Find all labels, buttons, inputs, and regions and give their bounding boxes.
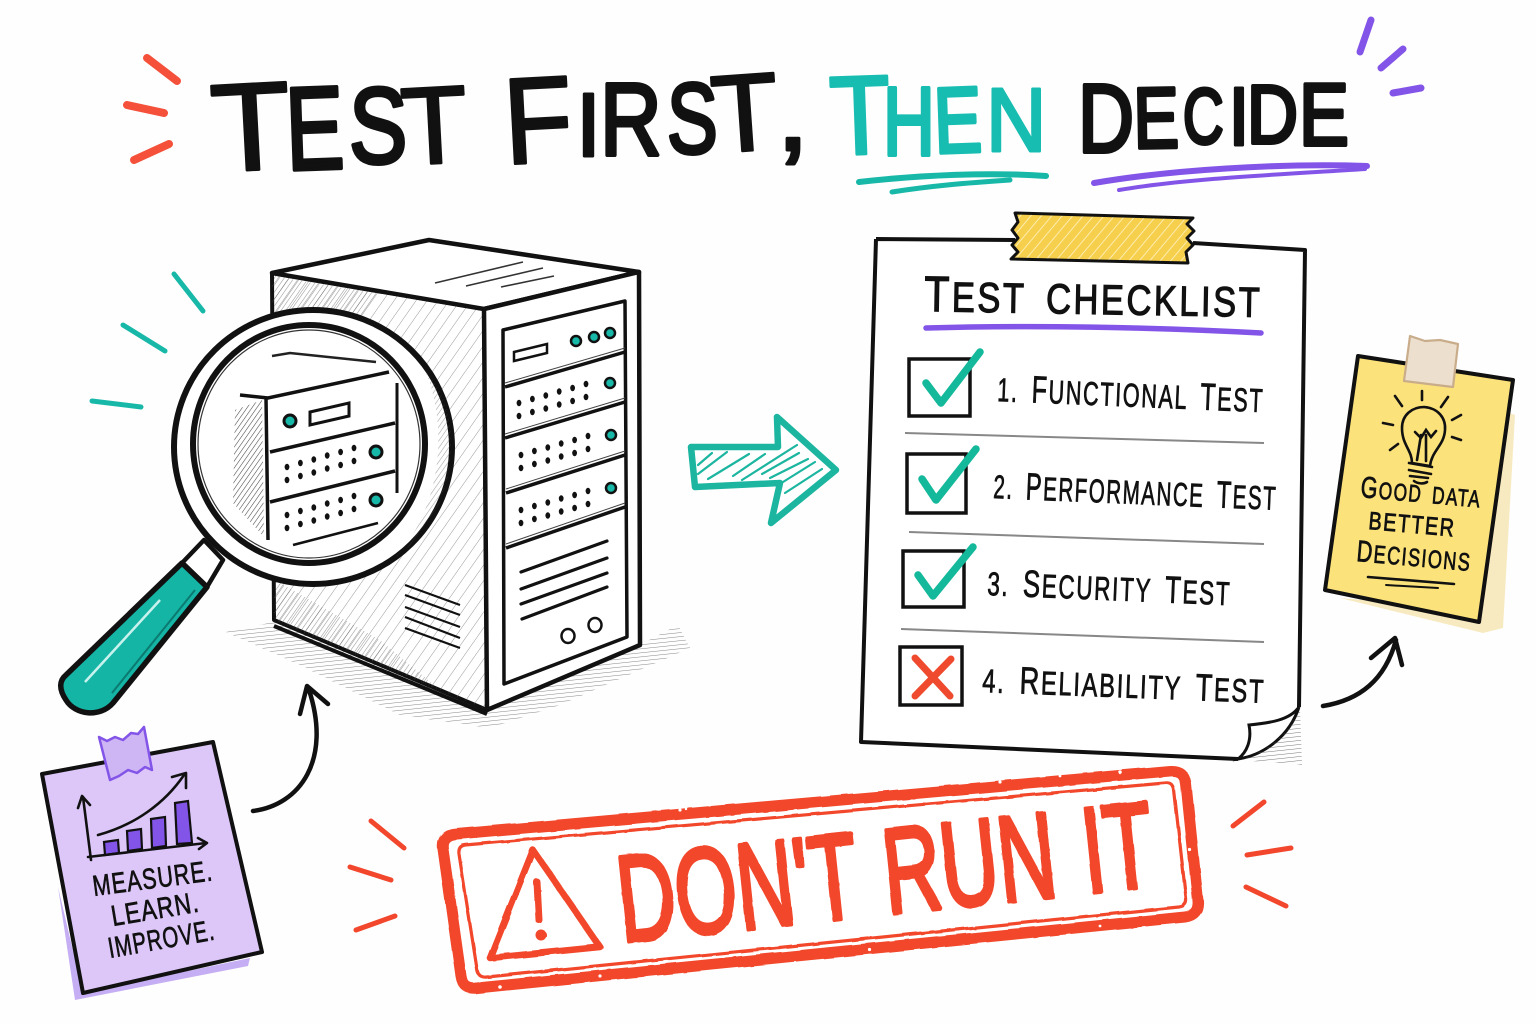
power buttons	[562, 618, 602, 643]
icon: warning triangle	[490, 850, 600, 958]
yellow tape	[1011, 213, 1194, 263]
stamp text: DON'T RUN IT	[611, 776, 1160, 968]
title: E	[932, 67, 983, 173]
teal arrow	[691, 417, 836, 523]
check item 3	[903, 547, 1232, 614]
note text: MEASURE.	[91, 855, 215, 903]
server front face	[484, 272, 640, 710]
accent rays: teal	[92, 274, 203, 407]
note text: GOOD DATA	[1359, 471, 1483, 515]
teal handle	[61, 563, 207, 713]
note text: DECISIONS	[1355, 535, 1473, 578]
curved arrow to yellow note	[1323, 638, 1402, 706]
stamp rays: left	[350, 821, 404, 930]
note text: LEARN.	[109, 887, 202, 933]
purple tape	[99, 727, 152, 780]
stamp rays: right	[1233, 802, 1291, 906]
check item 1: 1. FUNCTIONAL TEST	[997, 368, 1265, 421]
title: H	[883, 69, 935, 177]
title: C	[1183, 73, 1224, 160]
check item 1	[909, 352, 1265, 421]
side vents	[405, 585, 460, 648]
note text: IMPROVE.	[106, 915, 218, 965]
title: T	[827, 53, 893, 179]
title: E	[1299, 66, 1349, 164]
title: S	[667, 63, 718, 174]
tan tape	[1404, 336, 1458, 387]
title: T	[207, 56, 295, 199]
checklist heading: TEST CHECKLIST	[924, 266, 1263, 328]
drive dots	[517, 381, 588, 419]
front vents	[521, 541, 607, 619]
title: E	[1133, 71, 1180, 167]
check item 3: 3. SECURITY TEST	[987, 562, 1232, 614]
title: N	[986, 70, 1046, 171]
title: R	[600, 63, 662, 178]
yellow sticky note	[1325, 336, 1515, 633]
title: I	[576, 76, 601, 176]
status lights	[571, 328, 616, 493]
server tower	[226, 240, 690, 728]
magnified server	[233, 353, 397, 545]
title	[207, 50, 1349, 199]
server side face	[272, 273, 487, 710]
curved arrow to server	[253, 686, 328, 811]
title: ,	[776, 50, 810, 174]
title: F	[500, 50, 576, 190]
heading underline	[926, 327, 1261, 333]
title: D	[1078, 64, 1134, 173]
icon: lightbulb	[1383, 391, 1461, 483]
title: T	[707, 50, 783, 177]
accent rays: purple	[1360, 20, 1421, 93]
check item 2: 2. PERFORMANCE TEST	[993, 465, 1278, 519]
check item 2	[907, 449, 1278, 519]
check item 4	[900, 647, 1266, 712]
ground shadow	[226, 622, 690, 728]
check item 4: 4. RELIABILITY TEST	[982, 659, 1266, 712]
bar chart	[78, 773, 207, 860]
drive slot	[514, 344, 547, 361]
divider lines	[901, 433, 1264, 642]
stamp borders	[443, 771, 1198, 988]
title: D	[1247, 69, 1298, 161]
paper sheet	[861, 239, 1305, 759]
magnifying glass	[61, 310, 452, 713]
note text	[1355, 471, 1483, 578]
accent rays: red	[127, 58, 177, 160]
lens rim	[174, 310, 452, 584]
note text	[91, 855, 218, 965]
note text: BETTER	[1367, 507, 1457, 543]
title: S	[349, 65, 407, 186]
page curl	[1238, 707, 1299, 759]
title: I	[1228, 71, 1250, 163]
handle neck	[182, 540, 223, 587]
checklist paper	[861, 213, 1305, 765]
purple sticky note	[42, 727, 262, 1000]
title underline: decide	[1094, 165, 1367, 190]
warning stamp	[443, 770, 1198, 989]
server top face	[272, 240, 639, 309]
title: T	[398, 63, 471, 189]
title: E	[283, 61, 346, 195]
title underline: then	[859, 174, 1046, 192]
